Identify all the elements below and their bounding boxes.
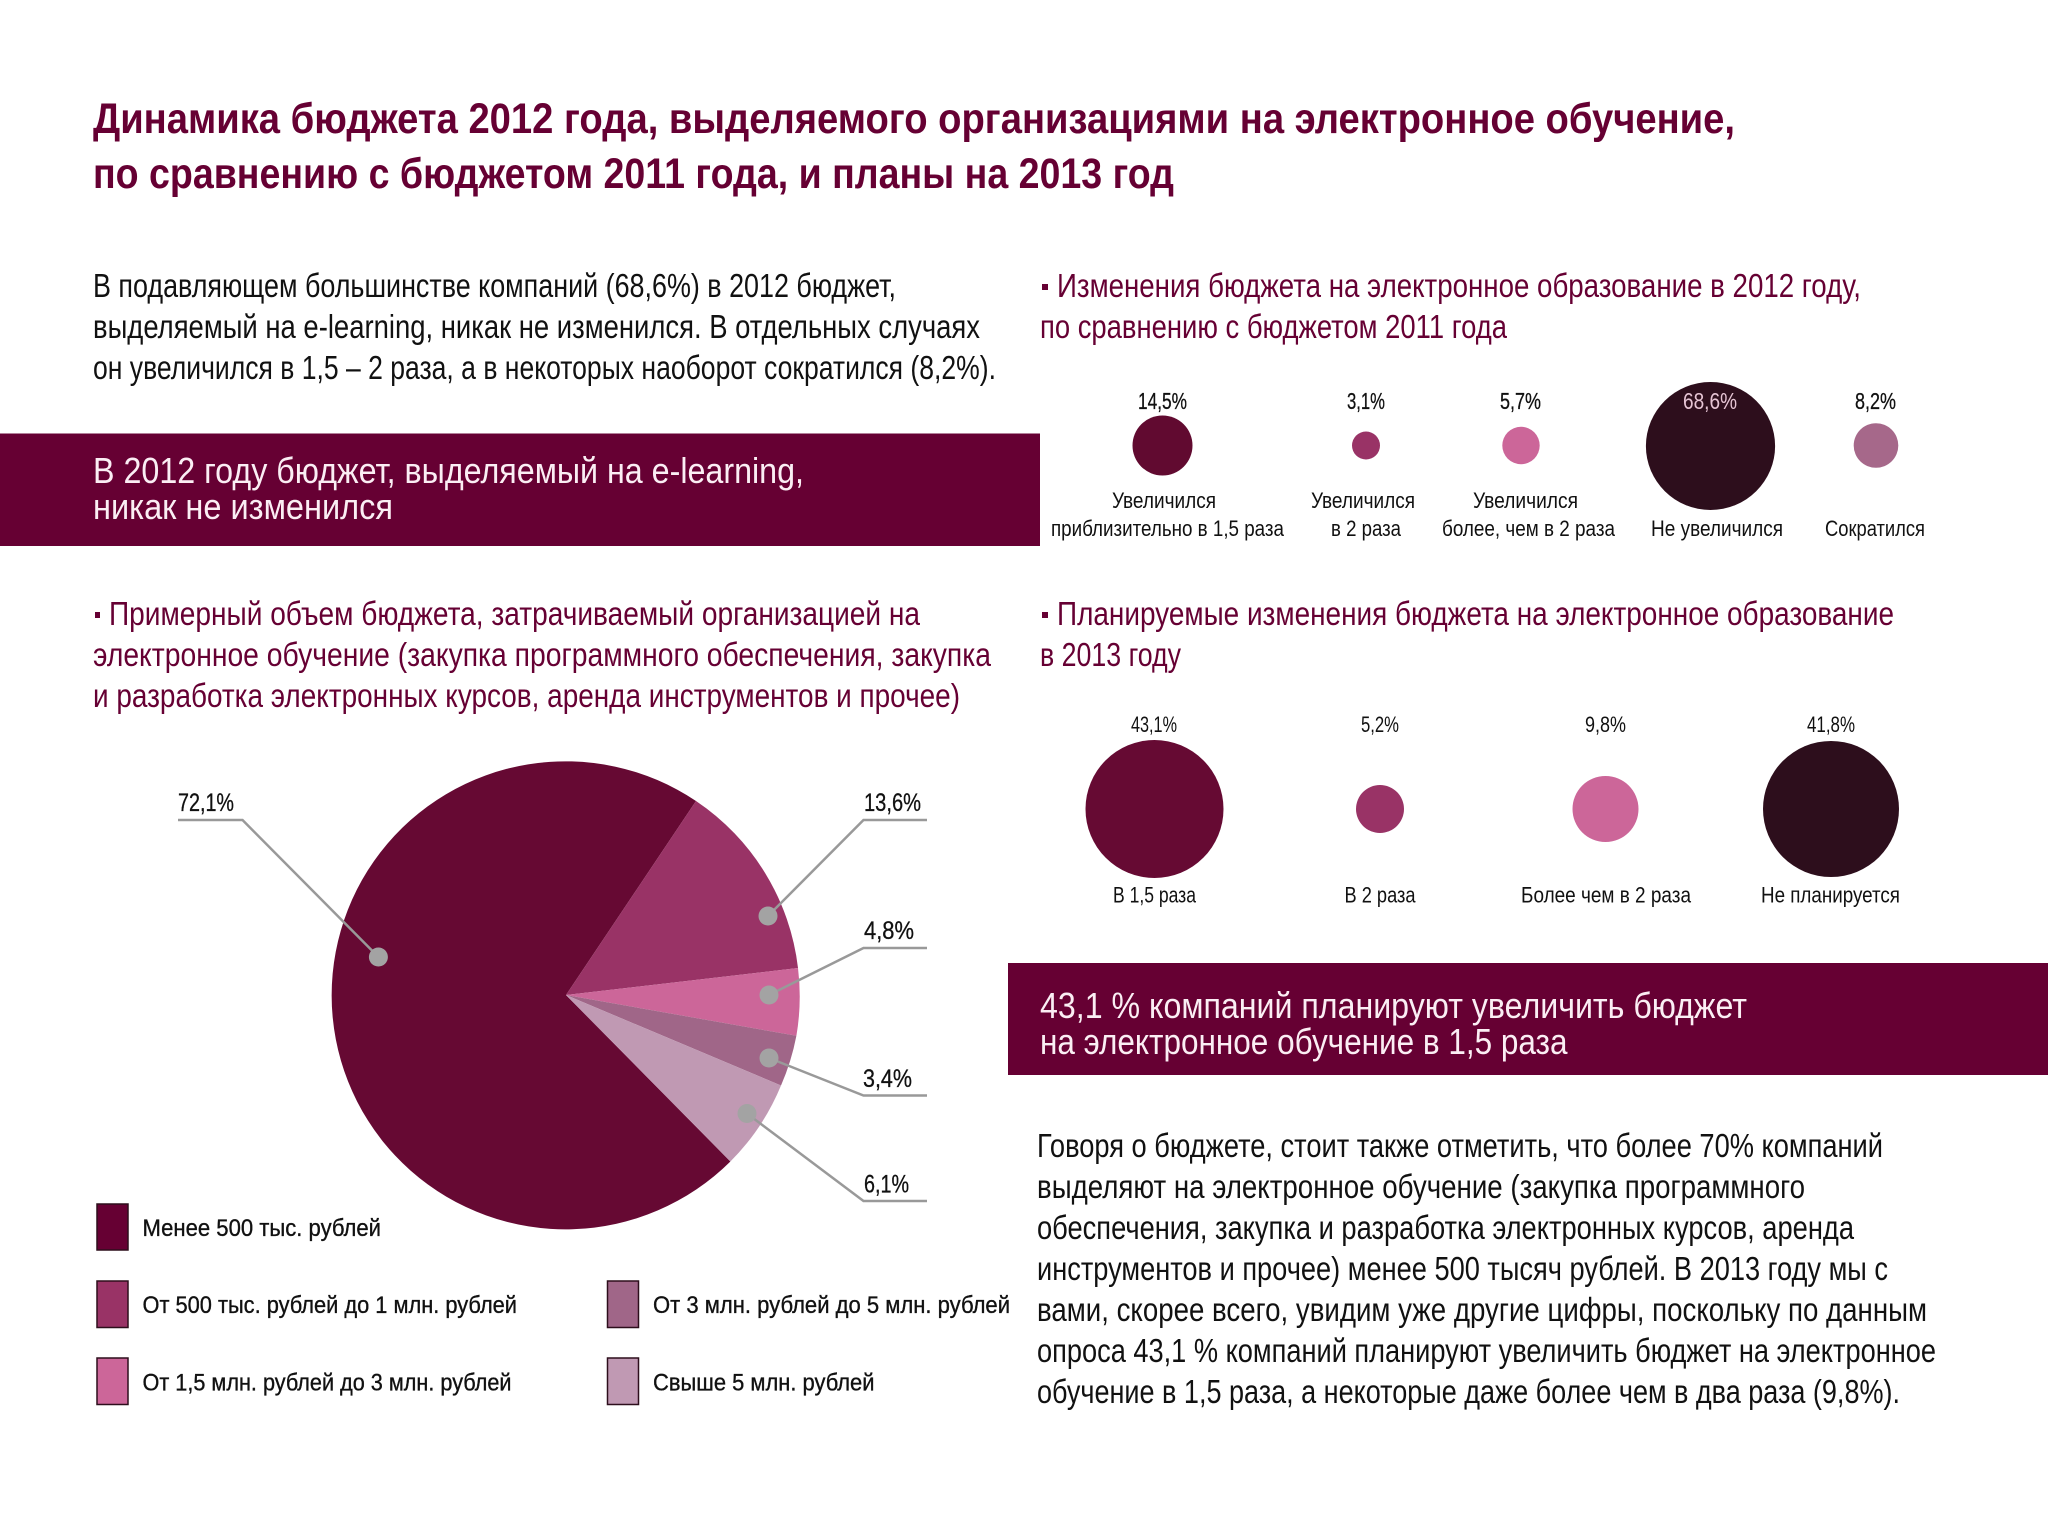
bubble: 5.7% bbox=[1442, 388, 1616, 541]
title: Динамика бюджета 2012 года, выделяемого организациями на электронное обучение, bbox=[93, 95, 1735, 143]
callout: 3.4%: 3,4% bbox=[863, 1065, 912, 1093]
callout: 72.1%: 72,1% bbox=[178, 789, 234, 817]
intro text block: выделяемый на e-learning, никак не изменился. В отдельных случаях bbox=[93, 308, 980, 345]
legend item: under 500k bbox=[97, 1204, 381, 1250]
bubble: 5.7%: более, чем в 2 раза bbox=[1442, 516, 1616, 541]
bubble: 3.1% bbox=[1311, 388, 1415, 541]
bubble: 8.2%: Сократился bbox=[1825, 516, 1925, 541]
callout: 6.1%: 6,1% bbox=[864, 1170, 909, 1198]
callout: 13.6% bbox=[758, 789, 927, 926]
heading: budget changes 2012 bbox=[1040, 267, 1861, 345]
heading: planned changes 2013 bbox=[1040, 595, 1894, 673]
intro text block: он увеличился в 1,5 – 2 раза, а в некоторых наоборот сократился (8,2%). bbox=[93, 349, 996, 386]
bubble: 9.8% bbox=[1521, 712, 1692, 908]
bubble: 9.8%: Более чем в 2 раза bbox=[1521, 882, 1692, 908]
legend item: under 500k: Менее 500 тыс. рублей bbox=[142, 1215, 381, 1242]
bubble: 9.8%: 9,8% bbox=[1585, 712, 1626, 737]
legend item: over 5m: Свыше 5 млн. рублей bbox=[653, 1370, 874, 1396]
callout: 6.1% bbox=[738, 1104, 927, 1201]
legend item: over 5m bbox=[608, 1358, 874, 1404]
bubble chart: planned changes 2013 bbox=[1086, 712, 1900, 908]
bubble: 41.8%: Не планируется bbox=[1761, 882, 1900, 908]
title bbox=[93, 95, 1735, 198]
bubble: 8.2% bbox=[1825, 388, 1925, 541]
bubble: 5.7%: 5,7% bbox=[1500, 388, 1541, 414]
intro text block bbox=[93, 267, 996, 386]
bubble: 3.1%: Увеличился bbox=[1311, 488, 1415, 513]
closing text block: обеспечения, закупка и разработка электронных курсов, аренда bbox=[1037, 1209, 1855, 1246]
intro text block: В подавляющем большинстве компаний (68,6%) в 2012 бюджет, bbox=[93, 267, 896, 304]
bubble: 3.1%: 3,1% bbox=[1347, 388, 1385, 414]
callout: 3.4% bbox=[760, 1048, 927, 1096]
bubble: 43.1%: 43,1% bbox=[1131, 712, 1177, 737]
bubble: 14.5% bbox=[1051, 388, 1285, 541]
callout: 4.8%: 4,8% bbox=[864, 917, 914, 945]
heading: planned changes 2013: Планируемые изменения бюджета на электронное образование bbox=[1057, 595, 1894, 632]
closing text block: выделяют на электронное обучение (закупка программного bbox=[1037, 1168, 1805, 1205]
heading: budget changes 2012: Изменения бюджета на электронное образование в 2012 году, bbox=[1057, 267, 1861, 304]
pie chart bbox=[332, 761, 800, 1229]
bubble: 68.6%: Не увеличился bbox=[1651, 516, 1783, 541]
heading: budget changes 2012: по сравнению с бюджетом 2011 года bbox=[1040, 308, 1508, 345]
closing text block: Говоря о бюджете, стоит также отметить, что более 70% компаний bbox=[1037, 1127, 1883, 1164]
bubble: 68.6%: 68,6% bbox=[1683, 388, 1737, 414]
heading: approximate budget volume: электронное обучение (закупка программного обеспечения, закупка bbox=[93, 636, 992, 673]
bubble: 14.5%: 14,5% bbox=[1138, 388, 1187, 414]
heading: approximate budget volume bbox=[93, 595, 992, 714]
banner: 43.1% plan to increase bbox=[1008, 963, 2048, 1075]
title: по сравнению с бюджетом 2011 года, и планы на 2013 год bbox=[93, 150, 1174, 198]
bubble: 5.7%: Увеличился bbox=[1473, 488, 1578, 513]
bubble: 41.8%: 41,8% bbox=[1807, 712, 1855, 737]
bubble: 5.2%: В 2 раза bbox=[1344, 882, 1416, 908]
bubble: 3.1%: в 2 раза bbox=[1331, 516, 1402, 541]
bubble: 14.5%: приблизительно в 1,5 раза bbox=[1051, 516, 1285, 541]
bubble: 68.6% bbox=[1646, 382, 1783, 541]
bubble: 43.1%: В 1,5 раза bbox=[1113, 882, 1197, 908]
legend item: 3m to 5m bbox=[608, 1281, 1010, 1328]
banner: 2012 budget unchanged: В 2012 году бюджет, выделяемый на e-learning, bbox=[93, 450, 804, 491]
closing text block bbox=[1037, 1127, 1936, 1410]
legend item: 500k to 1m bbox=[97, 1281, 517, 1328]
banner: 43.1% plan to increase: на электронное обучение в 1,5 раза bbox=[1040, 1021, 1568, 1062]
heading: planned changes 2013: в 2013 году bbox=[1040, 636, 1181, 673]
bubble: 14.5%: Увеличился bbox=[1112, 488, 1216, 513]
callout: 4.8% bbox=[760, 917, 927, 1004]
bubble: 8.2%: 8,2% bbox=[1855, 388, 1896, 414]
banner: 2012 budget unchanged bbox=[0, 434, 1040, 546]
bubble: 43.1% bbox=[1086, 712, 1224, 908]
legend item: 3m to 5m: От 3 млн. рублей до 5 млн. рублей bbox=[653, 1292, 1010, 1319]
legend bbox=[97, 1204, 1010, 1404]
banner: 43.1% plan to increase: 43,1 % компаний планируют увеличить бюджет bbox=[1040, 985, 1747, 1026]
legend item: 1.5m to 3m bbox=[97, 1358, 512, 1404]
bubble chart: budget changes 2012 bbox=[1051, 382, 1925, 541]
bubble: 41.8% bbox=[1761, 712, 1900, 908]
closing text block: инструментов и прочее) менее 500 тысяч рублей. В 2013 году мы с bbox=[1037, 1250, 1888, 1287]
bubble: 5.2%: 5,2% bbox=[1361, 712, 1399, 737]
heading: approximate budget volume: Примерный объем бюджета, затрачиваемый организацией на bbox=[109, 595, 921, 632]
callout: 13.6%: 13,6% bbox=[864, 789, 921, 817]
bubble: 5.2% bbox=[1344, 712, 1416, 908]
heading: approximate budget volume: и разработка электронных курсов, аренда инструментов и прочее) bbox=[93, 677, 960, 714]
legend item: 1.5m to 3m: От 1,5 млн. рублей до 3 млн. рублей bbox=[142, 1370, 512, 1396]
callout: 72.1% bbox=[178, 789, 388, 966]
legend item: 500k to 1m: От 500 тыс. рублей до 1 млн. рублей bbox=[142, 1292, 517, 1319]
banner: 2012 budget unchanged: никак не изменился bbox=[93, 486, 393, 527]
